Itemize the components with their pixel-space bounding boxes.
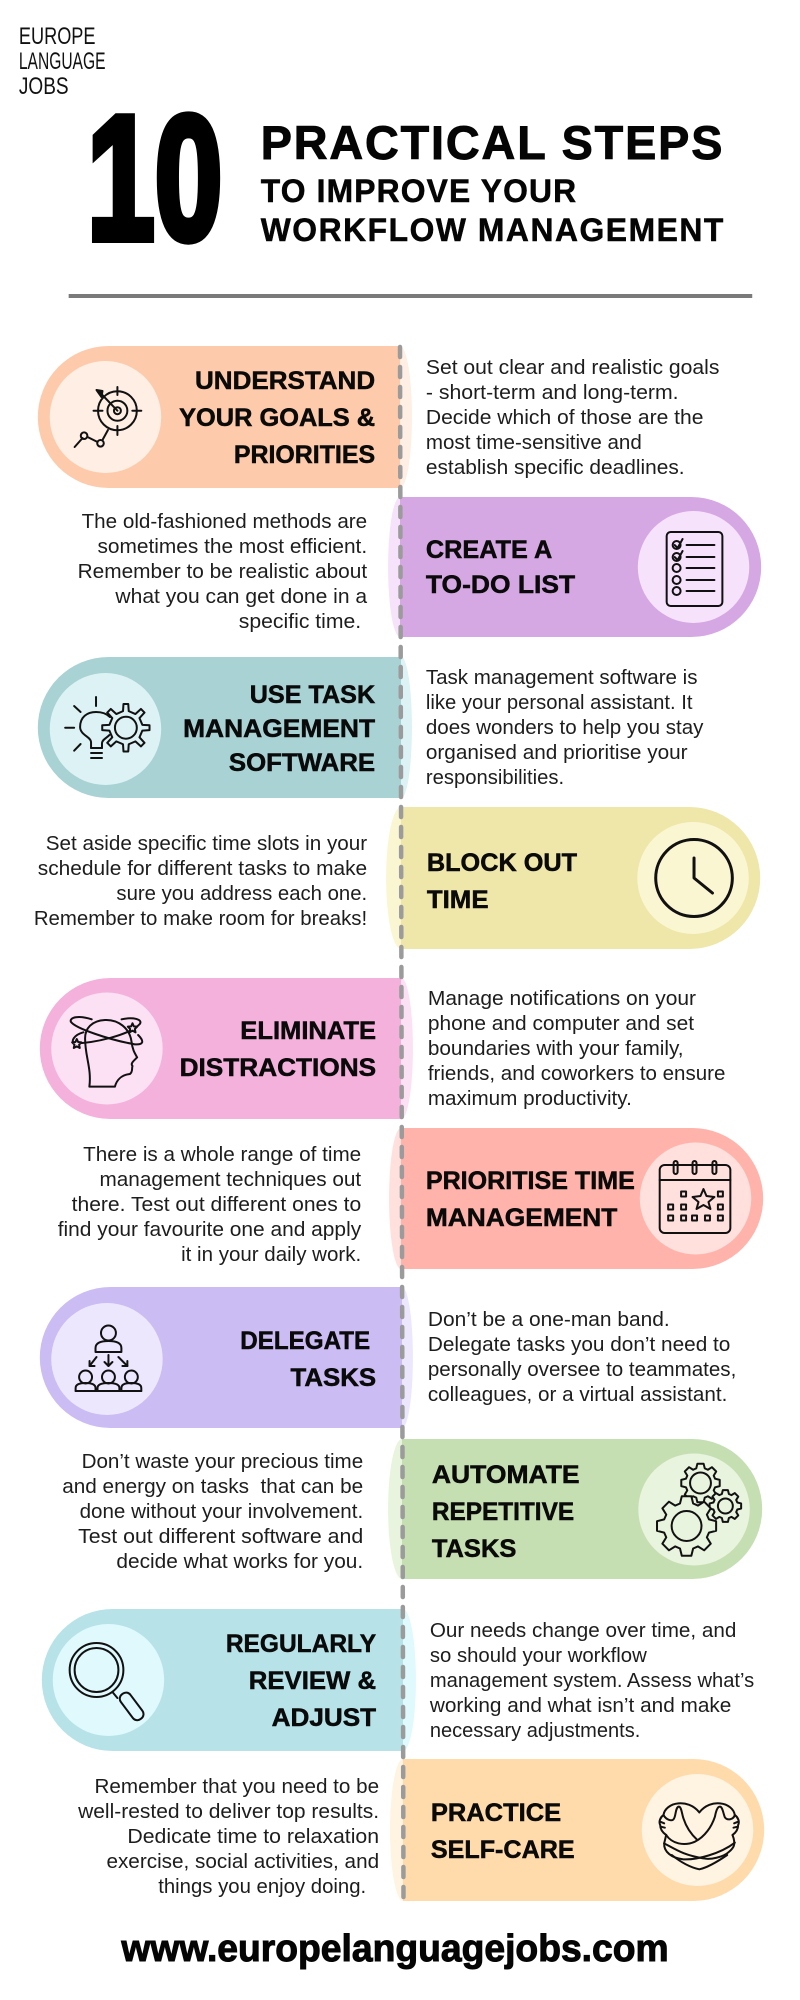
icon: hugging heart [660,1803,739,1869]
icon: magnifying glass [70,1643,146,1722]
heading: create a to-do list: TO-DO LIST [426,571,575,599]
heading: use task management software: SOFTWARE [229,749,375,777]
description: step 7: Don’t be a one-man band. [428,1309,670,1331]
icon: team hierarchy [76,1326,141,1391]
heading: understand your goals & priorities [179,367,375,469]
description: step 10 [77,1776,379,1898]
description: step 1: Set out clear and realistic goals [426,357,719,379]
description: step 5: friends, and coworkers to ensure [428,1063,725,1085]
heading: create a to-do list: CREATE A [426,536,552,564]
description: step 3: Task management software is [426,667,698,689]
logo: Europe Language Jobs: LANGUAGE [19,48,105,75]
description: step 6: There is a whole range of time [83,1144,361,1166]
heading: use task management software [183,681,375,777]
description: step 8: and energy on tasks that can be [62,1476,363,1498]
description: step 9: necessary adjustments. [430,1720,640,1742]
heading: prioritise time management: MANAGEMENT [426,1204,617,1232]
heading: regularly review & adjust: REVIEW & [249,1667,376,1695]
heading: regularly review & adjust [226,1630,376,1732]
title heading: WORKFLOW MANAGEMENT [261,212,724,248]
description: step 3: responsibilities. [426,767,564,789]
description: step 9: management system. Assess what’s [430,1670,754,1692]
heading: prioritise time management [426,1167,635,1232]
panel: step 6 prioritise time management [58,1128,763,1269]
description: step 3: does wonders to help you stay [426,717,704,739]
heading: automate repetitive tasks: AUTOMATE [432,1461,580,1489]
description: step 2: The old-fashioned methods are [82,511,367,533]
description: step 9 [429,1620,754,1742]
title heading [261,117,724,248]
description: step 4: schedule for different tasks to make [38,858,367,880]
panel: step 9 review and adjust [42,1609,754,1751]
description: step 6 [58,1144,362,1266]
description: step 5: Manage notifications on your [428,988,696,1010]
heading: regularly review & adjust: ADJUST [272,1704,376,1732]
heading: automate repetitive tasks: TASKS [432,1535,516,1563]
panel: step 7 delegate tasks [40,1287,736,1428]
title number: 10: 10 [87,80,222,277]
description: step 1: establish specific deadlines. [426,457,685,479]
icon: head with orbits and stars [71,1017,142,1087]
heading: practice self-care: PRACTICE [431,1799,561,1827]
title heading: PRACTICAL STEPS [261,117,722,169]
description: step 8: Don’t waste your precious time [82,1451,363,1473]
description: step 6: it in your daily work. [181,1244,361,1266]
panel: step 2 to-do list [78,497,761,637]
description: step 10: Dedicate time to relaxation [127,1826,379,1848]
description: step 5 [428,988,725,1110]
icon: clock [656,840,732,916]
description: step 9: Our needs change over time, and [430,1620,736,1642]
description: step 10: well-rested to deliver top results. [77,1801,379,1823]
description: step 2: Remember to be realistic about [78,561,368,583]
description: step 4: Set aside specific time slots in your [46,833,368,855]
heading: use task management software: MANAGEMENT [183,715,375,743]
heading: eliminate distractions: DISTRACTIONS [180,1054,376,1082]
description: step 9: working and what isn’t and make [429,1695,731,1717]
description: step 4: Remember to make room for breaks! [34,908,367,930]
icon: calendar with star [660,1161,730,1233]
description: step 5: maximum productivity. [428,1088,632,1110]
description: step 10: exercise, social activities, and [106,1851,379,1873]
icon: light bulb and gear [65,697,150,758]
description: step 8 [62,1451,363,1573]
heading: delegate tasks [240,1327,376,1392]
panel: step 4 block out time [34,807,760,949]
heading: block out time: TIME [427,886,489,914]
heading: use task management software: USE TASK [250,681,375,709]
panel: step 1 understand goals [38,346,719,488]
logo: Europe Language Jobs: JOBS [19,73,69,100]
heading: eliminate distractions [180,1017,376,1082]
heading: block out time: BLOCK OUT [427,849,577,877]
description: step 5: boundaries with your family, [428,1038,684,1060]
description: step 10: things you enjoy doing. [158,1876,366,1898]
description: step 3 [426,667,704,789]
description: step 1: Decide which of those are the [426,407,703,429]
icon: target with arrow [75,387,141,447]
description: step 7 [428,1309,736,1406]
heading: understand your goals & priorities: YOUR GOALS & [179,404,375,432]
logo: Europe Language Jobs: EUROPE [19,23,96,50]
heading: practice self-care: SELF-CARE [431,1836,575,1864]
description: step 3: like your personal assistant. It [426,692,693,714]
description: step 6: find your favourite one and apply [58,1219,361,1241]
heading: understand your goals & priorities: PRIORITIES [234,441,375,469]
description: step 2: what you can get done in a [114,586,368,608]
description: step 7: personally oversee to teammates, [428,1359,736,1381]
panel: step 5 eliminate distractions [40,978,725,1120]
panel: step 3 task management software [38,656,704,798]
description: step 7: Delegate tasks you don’t need to [428,1334,730,1356]
description: step 6: there. Test out different ones to [72,1194,361,1216]
title heading: TO IMPROVE YOUR [261,173,576,209]
heading: automate repetitive tasks [432,1461,580,1563]
description: step 5: phone and computer and set [428,1013,695,1035]
description: step 2 [78,511,368,633]
description: step 6: management techniques out [100,1169,362,1191]
description: step 8: Test out different software and [78,1526,363,1548]
description: step 2: sometimes the most efficient. [98,536,367,558]
heading: practice self-care [431,1799,575,1864]
icon: checklist [667,532,722,606]
heading: delegate tasks: DELEGATE [240,1327,370,1355]
description: step 8: decide what works for you. [116,1551,363,1573]
panel: step 10 practice self-care [77,1759,764,1901]
heading: create a to-do list [426,536,575,599]
heading: delegate tasks: TASKS [291,1364,376,1392]
heading: understand your goals & priorities: UNDERSTAND [195,367,375,395]
description: step 4 [34,833,368,930]
description: step 3: organised and prioritise your [426,742,688,764]
description: step 8: done without your involvement. [80,1501,363,1523]
description: step 1: most time-sensitive and [426,432,642,454]
logo: Europe Language Jobs [19,23,105,100]
heading: regularly review & adjust: REGULARLY [226,1630,376,1658]
description: step 1 [426,357,719,479]
description: step 9: so should your workflow [430,1645,647,1667]
heading: automate repetitive tasks: REPETITIVE [432,1498,574,1526]
heading: eliminate distractions: ELIMINATE [240,1017,376,1045]
heading: block out time [427,849,577,914]
description: step 2: specific time. [239,611,361,633]
heading: prioritise time management: PRIORITISE TIME [426,1167,635,1195]
panel: step 8 automate repetitive tasks [62,1439,762,1579]
description: step 10: Remember that you need to be [95,1776,379,1798]
description: step 7: colleagues, or a virtual assistant. [428,1384,727,1406]
description: step 4: sure you address each one. [116,883,367,905]
icon: three gears [657,1464,741,1556]
description: step 1: - short-term and long-term. [426,382,679,404]
footer website url: www.europelanguagejobs.com [120,1928,669,1970]
